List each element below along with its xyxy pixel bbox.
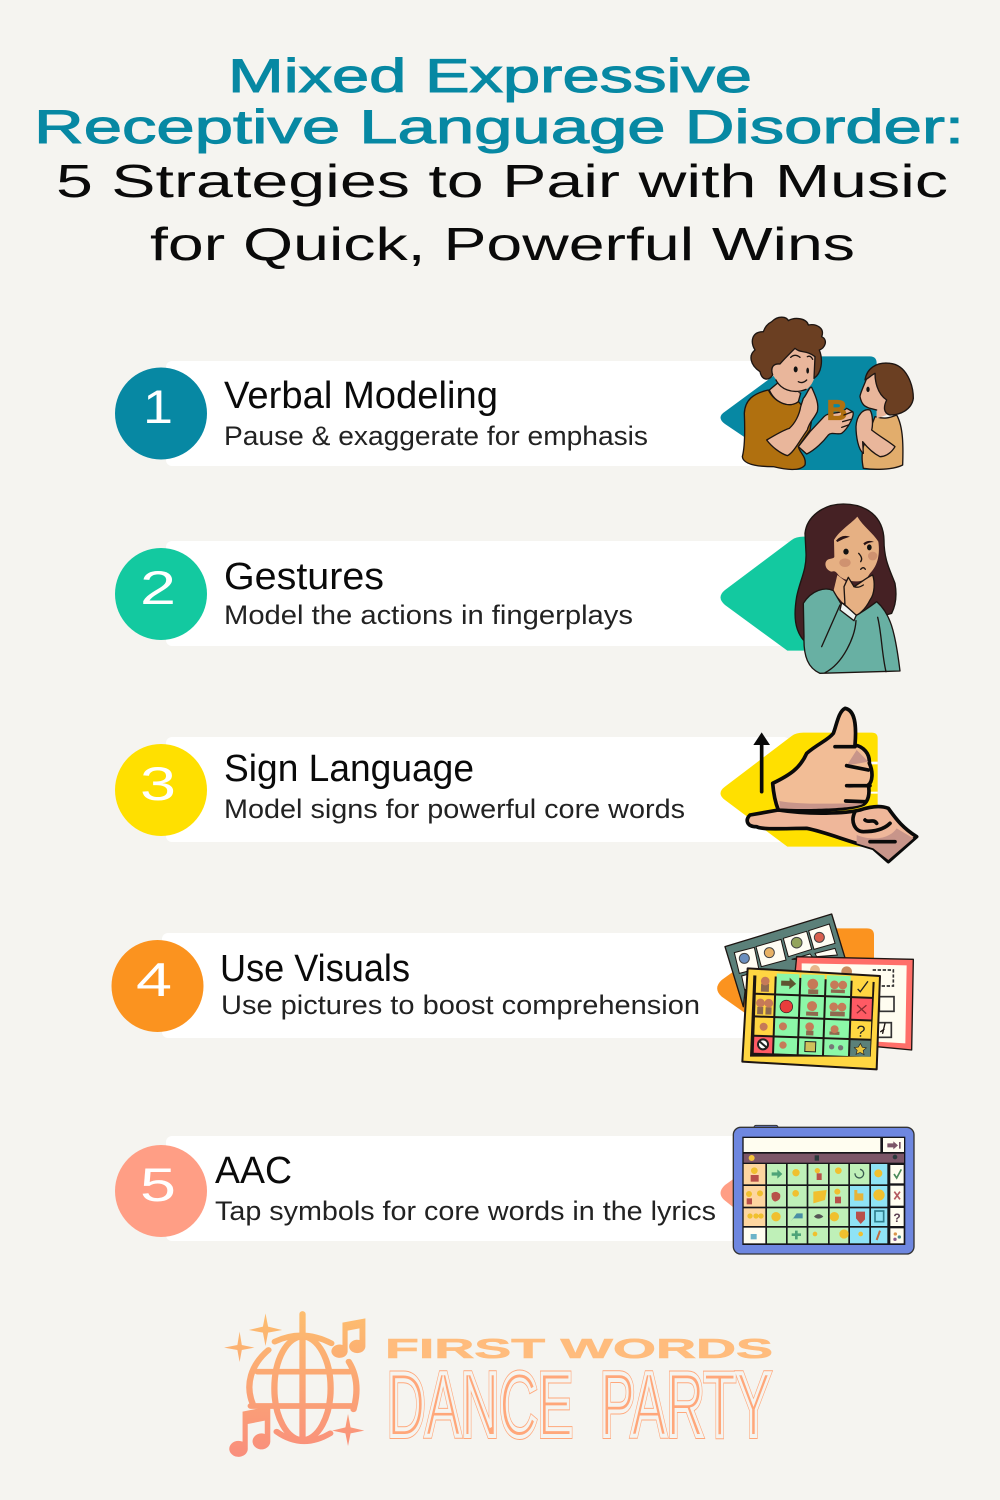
symbol grid — [744, 1164, 904, 1243]
number badge 3 — [115, 744, 207, 836]
panel: strategy 3 sign language — [115, 708, 917, 862]
wordmark: Dance: DANCE — [387, 1355, 573, 1456]
logo: First Words Dance Party — [224, 1313, 773, 1457]
description: Model signs for powerful core words — [224, 794, 685, 824]
letter B block: B — [827, 394, 847, 425]
subtitle line 1: 5 Strategies to Pair with Music — [56, 155, 948, 207]
panel: strategy 1 verbal modeling — [115, 317, 913, 470]
description: Tap symbols for core words in the lyrics — [215, 1196, 716, 1226]
icon: adult and child practising a letter sound — [720, 317, 913, 470]
wordmark: Dance — [387, 1355, 573, 1456]
number badge 2: 2 — [140, 561, 176, 614]
back board — [725, 914, 847, 1007]
panel: strategy 2 gestures — [115, 504, 900, 673]
symbol grid: ? — [893, 1211, 901, 1225]
description: Model the actions in fingerplays — [224, 600, 633, 630]
number badge 5: 5 — [140, 1158, 176, 1211]
wordmark: Party — [600, 1355, 771, 1456]
description: Pause & exaggerate for emphasis — [224, 421, 648, 451]
music notes — [229, 1318, 365, 1457]
heading: Gestures — [224, 556, 384, 598]
panel: strategy 5 AAC — [115, 1125, 914, 1254]
icon: disco globe with notes and sparkles — [224, 1313, 365, 1457]
wordmark: First Words: FIRST WORDS — [385, 1333, 773, 1364]
title line 1: Mixed Expressive — [228, 49, 752, 102]
number badge 4 — [112, 940, 204, 1032]
heading: Sign Language — [224, 748, 474, 790]
front board with symbol grid: ? — [856, 1024, 866, 1041]
icon: picture communication boards — [717, 914, 913, 1069]
number badge 1 — [115, 368, 207, 460]
number badge 2 — [115, 548, 207, 640]
subtitle line 2: for Quick, Powerful Wins — [150, 218, 855, 270]
title line 2: Receptive Language Disorder: — [34, 100, 964, 153]
number badge 4: 4 — [136, 953, 172, 1006]
upward arrow — [753, 732, 770, 792]
icon: thinking girl — [720, 504, 900, 673]
heading: AAC — [215, 1150, 292, 1192]
pink board — [795, 957, 913, 1050]
heading: Use Visuals — [220, 948, 410, 990]
title — [34, 49, 964, 270]
front board with symbol grid — [742, 968, 880, 1069]
number badge 1: 1 — [143, 380, 173, 433]
sparkles — [224, 1313, 364, 1446]
wordmark: Dance: DANCE — [387, 1355, 573, 1456]
description: Use pictures to boost comprehension — [221, 990, 700, 1020]
heading: Verbal Modeling — [224, 375, 498, 417]
wordmark: Party: PARTY — [600, 1355, 771, 1456]
wordmark: Party: PARTY — [600, 1355, 771, 1456]
panel: strategy 4 use visuals — [112, 914, 913, 1069]
number badge 5 — [115, 1145, 207, 1237]
number badge 3: 3 — [140, 757, 176, 810]
icon: sign for help — [720, 708, 917, 862]
icon: AAC tablet — [720, 1125, 914, 1254]
